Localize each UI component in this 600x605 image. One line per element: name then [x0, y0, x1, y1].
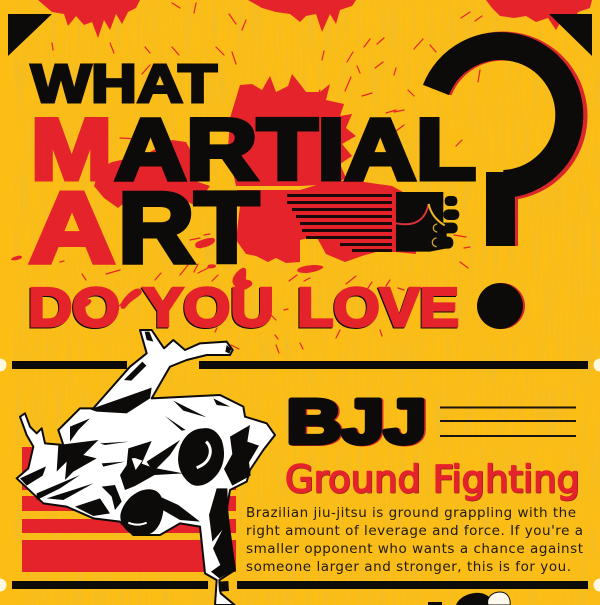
fighters silhouette: [17, 330, 275, 605]
title letter: red A: A: [29, 172, 115, 284]
description text: Brazilian jiu-jitsu is ground grappling with the: [246, 505, 576, 521]
question mark body: [436, 46, 569, 329]
corner triangle: top right: [549, 14, 592, 56]
subheading: ground fighting: Ground Fighting: [286, 458, 580, 502]
title line: do you love shadow: DO: [27, 277, 119, 339]
description text: right amount of leverage and force. If you're a: [246, 523, 583, 539]
left fighter hair: [120, 489, 163, 535]
red paint splatters: [38, 0, 592, 263]
heading lines: [440, 406, 576, 437]
title word: what: WHAT: [31, 54, 217, 114]
illustration: grappling fighters: [17, 330, 275, 605]
subheading: ground fighting: Ground Fighting: [285, 458, 580, 501]
title word: artial: ARTIAL: [115, 102, 476, 198]
title line: do you love: YOU: [143, 276, 274, 338]
hair highlight: [197, 442, 210, 468]
title word: rt: RT: [118, 172, 259, 284]
splatter flecks: [14, 3, 482, 353]
section rules: [0, 358, 600, 592]
title line: do you love: DO: [28, 276, 120, 338]
right fighter hair: [178, 428, 224, 486]
title: [27, 54, 476, 339]
gi shading: [20, 332, 259, 592]
next section figure peeking in: [428, 592, 510, 605]
title line: do you love: LOVE: [297, 276, 459, 338]
title line: do you love: [28, 276, 459, 338]
description text: smaller opponent who wants a chance against: [246, 541, 583, 557]
heading: BJJ: BJJ: [286, 388, 426, 457]
title letter: red M: M: [31, 102, 112, 198]
description text: someone larger and stronger, this is for you.: [246, 559, 571, 575]
description text: [246, 505, 583, 575]
title line: do you love shadow: LOVE: [296, 277, 458, 339]
corner triangle: top left: [8, 14, 52, 56]
speed lines: [287, 194, 392, 252]
fist: [396, 192, 459, 252]
question mark: [436, 46, 573, 329]
icon: speeding fist: [287, 192, 459, 252]
red stripes behind fighters: [22, 447, 236, 572]
question mark shadow: [438, 46, 573, 329]
title line: do you love shadow: [27, 277, 458, 339]
title line: do you love shadow: YOU: [142, 277, 273, 339]
heading: BJJ: BJJ: [288, 388, 428, 458]
